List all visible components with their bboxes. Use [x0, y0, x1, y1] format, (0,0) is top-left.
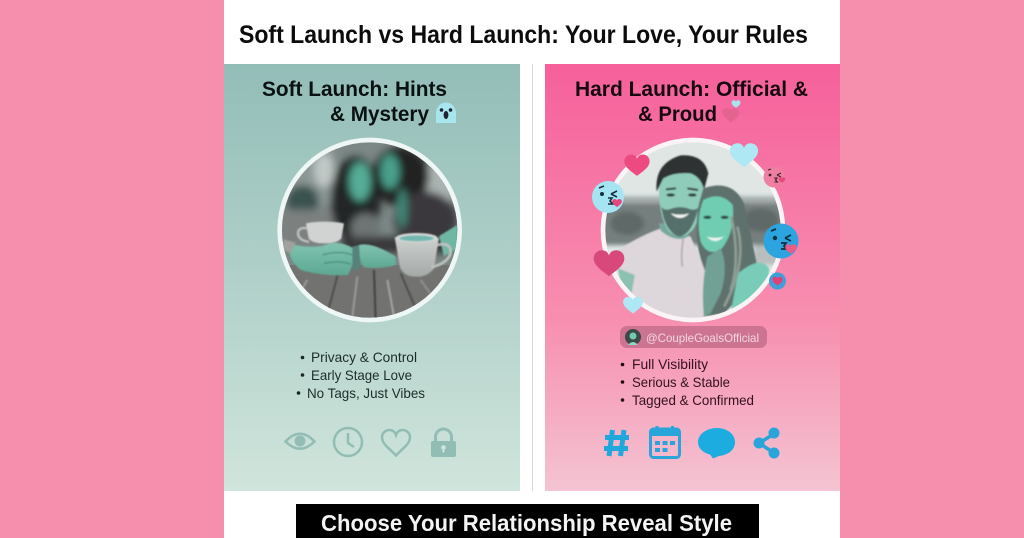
title: Soft Launch vs Hard Launch: Your Love, Your Rules: [239, 21, 808, 49]
icon: kiss emoji small pink: [764, 166, 785, 188]
hands: [289, 243, 354, 275]
icon: kiss emoji right: [764, 224, 798, 258]
centre divider: [532, 64, 533, 491]
bullet list: hard launch: [621, 356, 754, 408]
icon: speech bubble: [698, 428, 735, 458]
icon: padlock: [431, 429, 456, 457]
icon: kiss emoji left: [592, 181, 624, 213]
bullet list: soft launch: Early Stage Love: [311, 367, 412, 383]
man: [618, 228, 705, 318]
icon: share: [754, 428, 780, 458]
icon: calendar: [650, 426, 680, 458]
heading: hard launch: & Proud: [638, 102, 717, 126]
icon: rose heart left: [594, 250, 624, 276]
icon: heading hearts: [723, 100, 740, 122]
woman: [697, 185, 757, 317]
heading: hard launch: [575, 77, 808, 126]
heading: soft launch: & Mystery: [330, 102, 429, 126]
icon: pink heart top left: [624, 154, 650, 176]
photo: blurred couple at cafe: [277, 138, 462, 322]
bullet list: hard launch: Serious & Stable: [632, 374, 730, 390]
footer banner: Choose Your Relationship Reveal Style: [321, 510, 732, 536]
icon: cyan heart bottom: [623, 297, 643, 314]
bullet list: soft launch: No Tags, Just Vibes: [307, 385, 425, 401]
bullet list: hard launch: Full Visibility: [632, 356, 708, 372]
cup front: [395, 235, 439, 277]
bullet list: soft launch: [297, 349, 425, 401]
handle pill: [620, 326, 767, 348]
photo: smiling couple: [601, 138, 787, 327]
panel: hard launch: [545, 64, 840, 491]
icon: eye: [286, 434, 314, 449]
white card: [224, 0, 840, 538]
heading: soft launch: Soft Launch: Hints: [262, 77, 447, 101]
handle pill: @CoupleGoalsOfficial: [646, 331, 759, 345]
heading: soft launch: [262, 77, 447, 126]
heading: hard launch: Hard Launch: Official &: [575, 77, 808, 101]
bullet list: soft launch: Privacy & Control: [311, 349, 417, 365]
icon: heart outline: [382, 430, 410, 456]
icon: clock: [334, 428, 362, 456]
icon: hashtag: [604, 430, 629, 456]
table: [289, 265, 450, 318]
panel: soft launch: [224, 64, 520, 491]
icon: cyan heart top right: [730, 143, 758, 167]
bullet list: hard launch: Tagged & Confirmed: [632, 392, 754, 408]
icon: heart badge: [769, 272, 786, 290]
cup back: [306, 222, 344, 243]
icon: shocked face: [436, 102, 456, 123]
